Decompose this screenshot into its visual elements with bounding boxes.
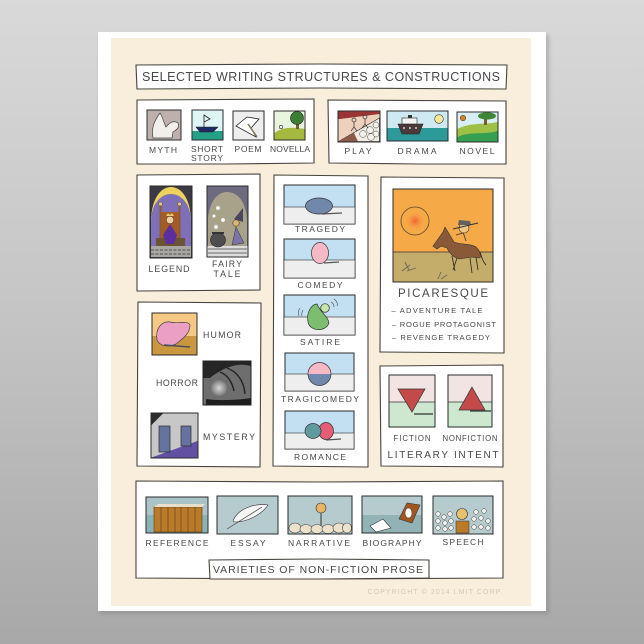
icon: speech <box>433 496 493 534</box>
label: poem: POEM <box>234 144 262 154</box>
icon: novel <box>457 112 498 142</box>
icon: mystery <box>151 413 198 458</box>
label: nonfiction: NONFICTION <box>442 434 498 443</box>
label: myth: MYTH <box>149 145 177 155</box>
label: fairy tale <box>212 259 242 279</box>
icon: myth <box>147 110 181 140</box>
icon: rider on horse <box>393 189 493 282</box>
icon: short story <box>192 110 223 140</box>
label: narrative: NARRATIVE <box>288 538 350 548</box>
title <box>136 64 507 89</box>
label: fairy tale: TALE <box>214 269 241 279</box>
icon: play <box>338 111 380 142</box>
label: novella: NOVELLA <box>270 144 310 154</box>
panel: non-fiction varieties <box>136 481 503 579</box>
panel: tragedy to romance <box>273 175 368 467</box>
text block: picaresque traits: – REVENGE TRAGEDY <box>392 333 490 342</box>
label: short story: SHORT <box>191 144 223 154</box>
heading: varieties of non-fiction prose <box>209 559 429 579</box>
label: speech: SPEECH <box>442 537 484 547</box>
label: fairy tale: FAIRY <box>212 259 242 269</box>
title: SELECTED WRITING STRUCTURES & CONSTRUCTIONS <box>142 70 500 84</box>
label: satire: SATIRE <box>300 337 340 347</box>
icon: reference <box>146 497 208 533</box>
icon: tragicomedy <box>285 353 354 391</box>
text block: picaresque traits <box>392 306 496 342</box>
label: short story: STORY <box>191 153 223 163</box>
label: romance: ROMANCE <box>294 452 346 462</box>
heading: literary intent: LITERARY INTENT <box>388 450 498 461</box>
label: reference: REFERENCE <box>146 538 209 548</box>
panel: literary intent <box>380 365 503 467</box>
label: comedy: COMEDY <box>298 280 343 290</box>
panel: long forms <box>328 100 506 164</box>
icon: satire <box>284 295 355 335</box>
icon: biography <box>362 496 422 533</box>
cream background panel <box>111 38 531 606</box>
poster shadow <box>100 35 549 614</box>
icon: comedy <box>284 239 355 278</box>
icon: poem <box>233 111 264 140</box>
label: humor: HUMOR <box>203 330 241 340</box>
icon: narrative <box>288 496 352 534</box>
poster paper <box>98 32 546 611</box>
icon: drama <box>387 111 448 141</box>
label: tragedy: TRAGEDY <box>295 224 345 234</box>
heading: varieties of non-fiction prose: VARIETIES OF NON-FICTION PROSE <box>213 564 423 576</box>
label: short story <box>191 144 223 163</box>
icon: romance <box>285 411 354 449</box>
icon: nonfiction <box>448 375 492 427</box>
label: play: PLAY <box>344 146 372 156</box>
label: tragicomedy: TRAGICOMEDY <box>281 394 359 404</box>
icon: novella <box>274 111 305 140</box>
icon: tragedy <box>284 185 355 224</box>
icon: horror <box>203 361 251 405</box>
heading: picaresque: PICARESQUE <box>398 288 488 300</box>
icon: fiction <box>389 375 435 427</box>
label: mystery: MYSTERY <box>203 432 255 442</box>
text block: picaresque traits: – ADVENTURE TALE <box>392 306 482 315</box>
icon: legend <box>150 186 192 258</box>
panel: humor horror mystery <box>137 302 261 467</box>
label: drama: DRAMA <box>398 146 437 156</box>
icon: essay <box>217 496 278 534</box>
label: legend: LEGEND <box>148 264 190 274</box>
label: biography: BIOGRAPHY <box>362 538 422 548</box>
copyright: COPYRIGHT © 2014 LMIT CORP. <box>368 588 503 596</box>
icon: humor <box>152 313 197 355</box>
panel: picaresque <box>380 177 504 353</box>
text block: picaresque traits: – ROGUE PROTAGONIST <box>392 320 496 329</box>
label: essay: ESSAY <box>230 538 266 548</box>
label: fiction: FICTION <box>394 434 430 443</box>
label: horror: HORROR <box>156 378 198 388</box>
panel: legend and fairy tale <box>137 174 260 291</box>
label: novel: NOVEL <box>460 146 495 156</box>
panel: short forms <box>137 99 314 164</box>
icon: fairy tale <box>207 186 248 257</box>
